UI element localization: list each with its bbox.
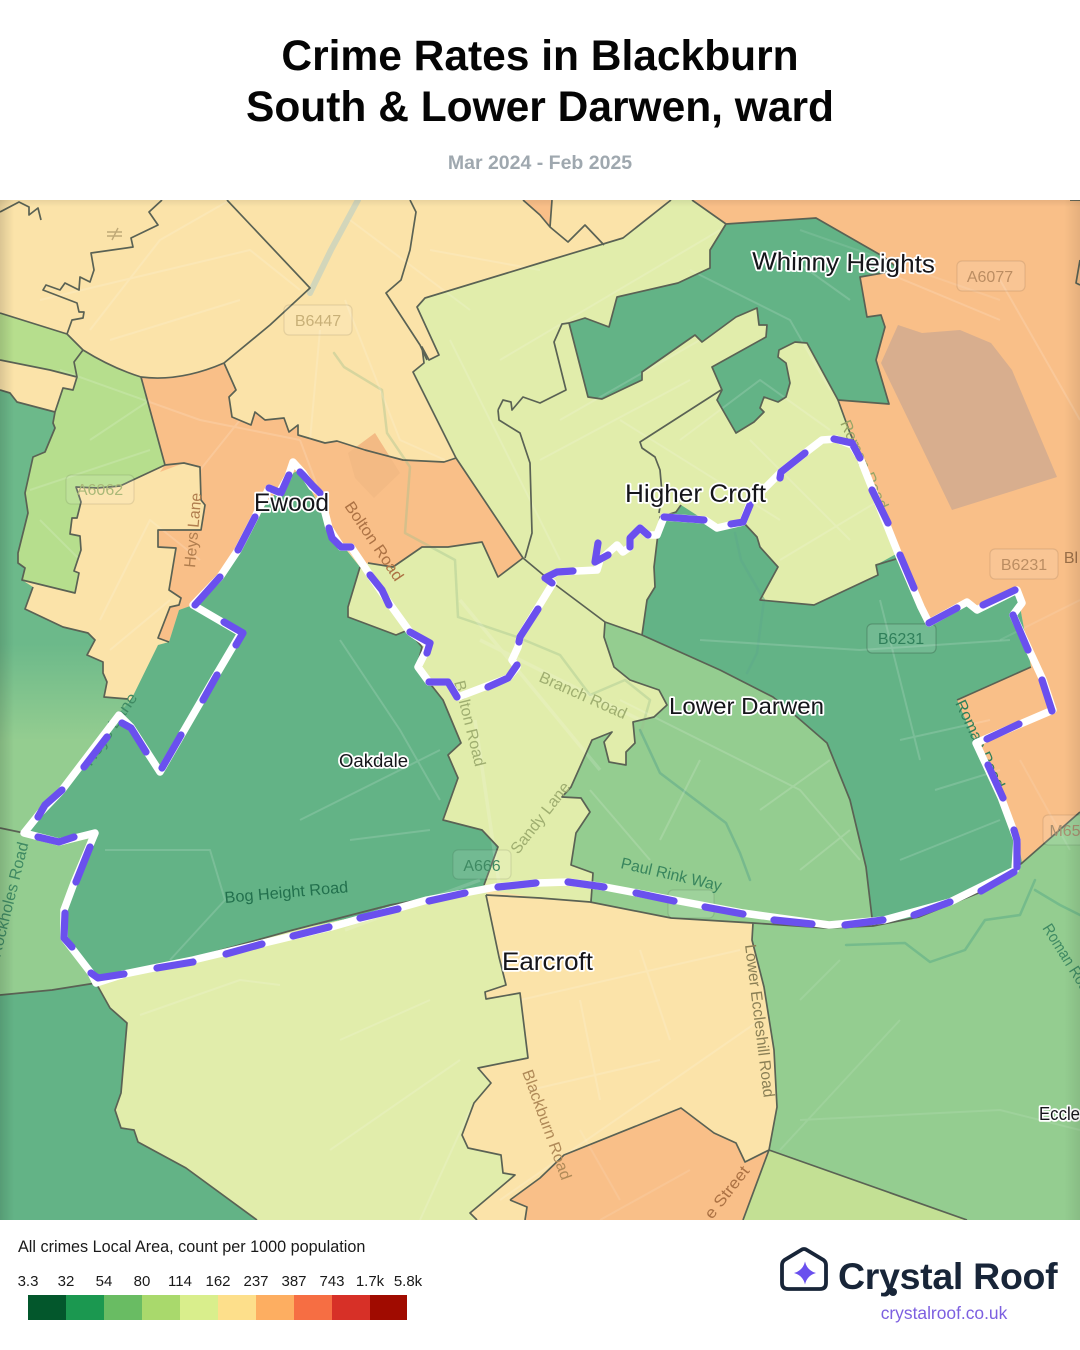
road numbers: M65 xyxy=(1049,823,1080,840)
legend scale labels: 5.8k xyxy=(394,1273,422,1290)
legend scale labels: 114 xyxy=(168,1273,192,1290)
brand name: Crystal Roof xyxy=(838,1255,1057,1297)
ward boundary: white underlay xyxy=(24,439,1053,983)
legend scale labels: 3.3 xyxy=(18,1273,38,1290)
place labels: Whinny Heights xyxy=(752,247,935,279)
road numbers: Bl xyxy=(1064,550,1078,567)
legend title: All crimes Local Area, count per 1000 population xyxy=(18,1238,365,1256)
map xyxy=(0,200,1080,1220)
icon: Crystal Roof house logo xyxy=(780,1247,828,1291)
legend scale labels: 162 xyxy=(205,1273,231,1290)
road numbers: B6447 xyxy=(295,313,341,330)
subtitle: date range: Mar 2024 - Feb 2025 xyxy=(448,152,632,174)
area: south orange xyxy=(510,1108,769,1220)
legend scale labels: 32 xyxy=(58,1273,74,1290)
area: yellow-green central xyxy=(348,200,898,902)
legend scale labels: 1.7k xyxy=(356,1273,384,1290)
road numbers: B6231 xyxy=(1001,557,1047,574)
road numbers: A6062 xyxy=(77,482,123,499)
road shields xyxy=(66,261,1080,918)
legend scale labels: 743 xyxy=(319,1273,345,1290)
legend scale labels: 237 xyxy=(243,1273,269,1290)
area: quarry xyxy=(881,325,1057,510)
road names: Paul Rink Way xyxy=(619,855,723,895)
area: light green west xyxy=(0,313,165,593)
faint street network xyxy=(30,200,1080,1220)
legend scale labels: 54 xyxy=(96,1273,112,1290)
road names: Bolton Road xyxy=(341,499,406,585)
ward boundary: purple dashes xyxy=(38,439,1052,978)
place labels: Oakdale xyxy=(339,751,408,771)
map edge shading xyxy=(0,200,1080,1220)
road names: Blackburn Road xyxy=(518,1068,574,1182)
title xyxy=(246,33,834,131)
area: south-east mid green xyxy=(752,812,1080,1220)
road numbers: A6077 xyxy=(967,269,1013,286)
area: south-west dark green xyxy=(0,983,257,1220)
icon: keyhole tail on the y of the logo xyxy=(889,1288,897,1296)
area: Oakdale dark green xyxy=(24,470,498,983)
road names: Bolton Road xyxy=(450,679,488,768)
road numbers: B6231 xyxy=(878,631,924,648)
area: orange east xyxy=(692,200,1080,863)
road numbers xyxy=(77,269,1080,875)
road names: Heys Lane xyxy=(80,690,141,769)
place labels: Higher Croft xyxy=(625,480,766,508)
website: crystalroof.co.uk xyxy=(881,1303,1007,1323)
legend scale labels: 387 xyxy=(281,1273,307,1290)
place labels: Earcroft xyxy=(502,948,593,976)
road names: Roman Road xyxy=(951,698,1007,792)
area: west green xyxy=(0,390,140,995)
area: south-east light green xyxy=(743,1150,967,1220)
road numbers: A666 xyxy=(463,858,501,875)
area: orange north tip xyxy=(523,200,552,227)
title: South & Lower Darwen, ward xyxy=(246,84,834,131)
railway station symbol xyxy=(107,228,122,240)
legend scale labels xyxy=(18,1273,422,1290)
legend colour swatches xyxy=(28,1295,407,1320)
area: south-west yellow-green xyxy=(96,890,528,1220)
map base: peach areas xyxy=(0,200,1080,1220)
title: Crime Rates in Blackburn xyxy=(281,33,799,80)
road names: Branch Road xyxy=(536,669,629,723)
area: Whinny Heights dark green xyxy=(569,218,900,433)
road names: Sandy Lane xyxy=(508,779,574,857)
area boundaries xyxy=(0,200,1080,1220)
road names: Roman Road xyxy=(836,418,891,512)
place labels: Ewood xyxy=(254,489,329,517)
area: east dark green xyxy=(642,505,1031,926)
road names: Bog Height Road xyxy=(224,879,349,907)
road names: Heys Lane xyxy=(182,492,206,568)
area: Ewood orange xyxy=(141,363,523,642)
place labels xyxy=(254,247,1080,1124)
road names xyxy=(0,418,1080,1222)
road names: Lower Eccleshill Road xyxy=(741,943,777,1098)
rivers xyxy=(310,200,1080,962)
legend scale labels: 80 xyxy=(134,1273,150,1290)
area: darker orange retail patch xyxy=(348,433,400,498)
area: Lower Darwen mid green xyxy=(562,622,873,928)
place labels: Lower Darwen xyxy=(669,693,824,719)
